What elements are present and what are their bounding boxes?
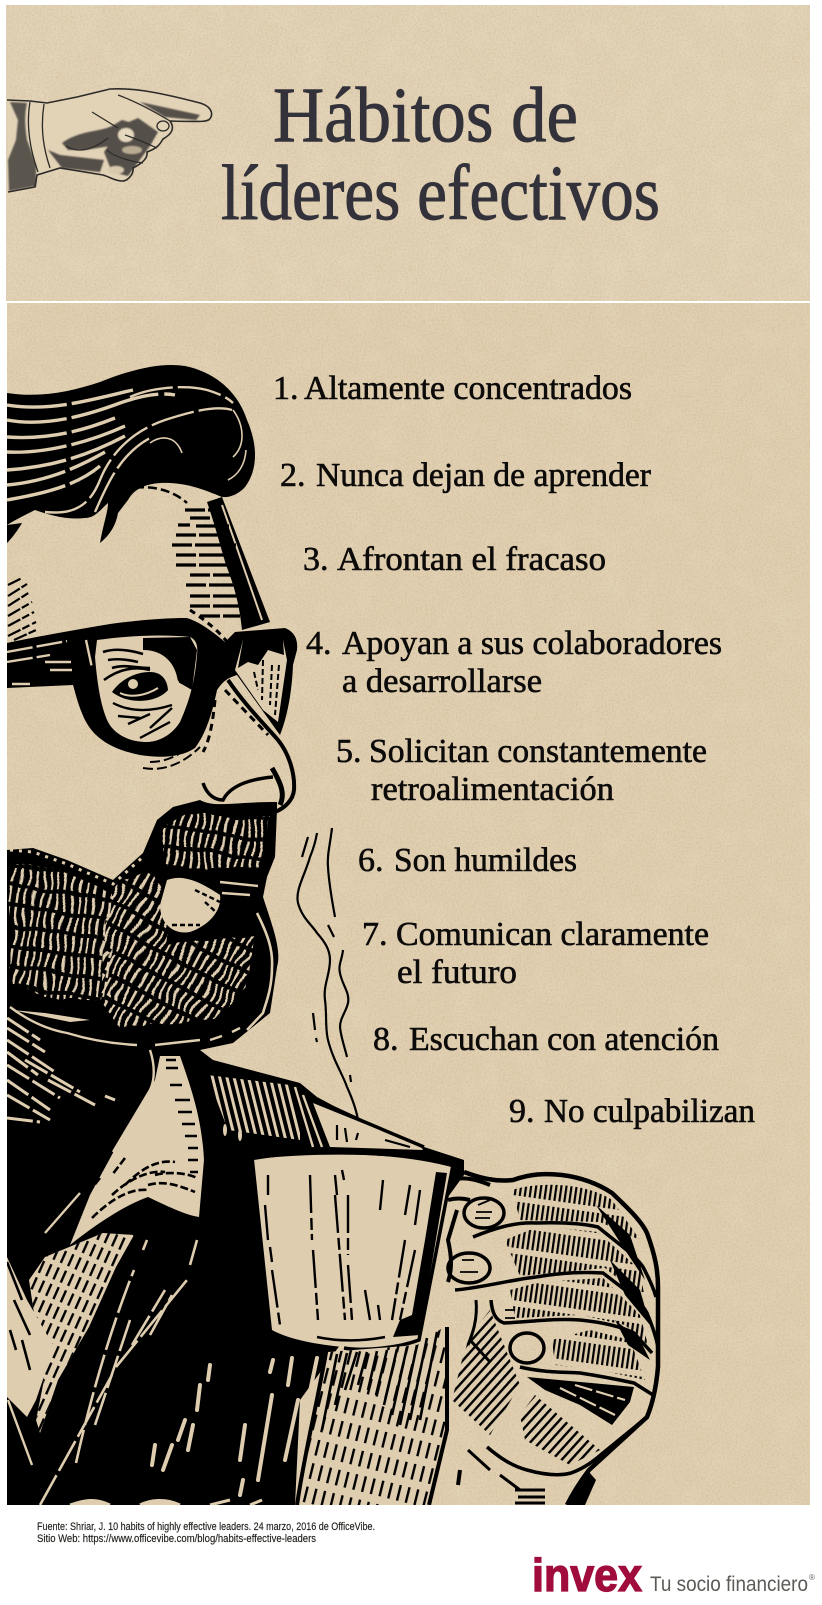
item 5	[336, 733, 707, 808]
item 8: 8.	[373, 1021, 398, 1058]
item 1: 1.	[273, 370, 298, 407]
logo: invex	[532, 1549, 815, 1601]
panel: main paper background	[7, 303, 810, 1505]
title line 2: líderes efectivos	[221, 149, 660, 236]
glasses	[7, 618, 297, 757]
item 6: Son humildes	[394, 842, 577, 879]
logo tagline: Tu socio financiero	[650, 1573, 808, 1596]
item 2: Nunca dejan de aprender	[316, 457, 652, 494]
item 7: el futuro	[397, 954, 517, 991]
item 2: 2.	[280, 457, 306, 494]
shoulder	[207, 1075, 424, 1150]
forehead shading	[172, 497, 270, 650]
item 9: No culpabilizan	[544, 1093, 755, 1130]
item 6: 6.	[358, 842, 384, 879]
shirt collar	[45, 1050, 204, 1245]
habits list	[273, 370, 755, 1130]
item 3: 3.	[303, 541, 328, 578]
item 1: Altamente concentrados	[304, 370, 632, 407]
item 4: Apoyan a sus colaboradores	[342, 625, 722, 662]
item 4: 4.	[306, 625, 332, 662]
item 5: 5.	[336, 733, 362, 770]
temple hatching	[8, 578, 36, 640]
hair	[7, 365, 255, 543]
eye	[103, 650, 179, 738]
item 3: Afrontan el fracaso	[337, 541, 606, 578]
title	[221, 71, 660, 236]
beard and jacket mass	[7, 800, 464, 1505]
illustration: bearded man with coffee	[7, 365, 658, 1505]
title line 1: Hábitos de	[273, 71, 578, 158]
beard hatching	[10, 812, 272, 1045]
item 8: Escuchan con atención	[409, 1021, 719, 1058]
item 7	[362, 916, 709, 991]
nose	[143, 680, 294, 812]
jacket lapel	[7, 1233, 317, 1505]
item 9: 9.	[509, 1093, 534, 1130]
registered mark: ®	[809, 1573, 815, 1582]
item 5: retroalimentación	[371, 771, 614, 808]
panel: title paper background	[6, 5, 810, 301]
sleeve	[295, 1325, 447, 1505]
item 4: a desarrollarse	[342, 663, 542, 700]
steam	[297, 828, 358, 1120]
source line 2: Sitio Web: https://www.officevibe.com/blog/habits-effective-leaders	[37, 1533, 316, 1545]
item 4	[306, 625, 722, 700]
source line 1: Fuente: Shriar, J. 10 habits of highly effective leaders. 24 marzo, 2016 de OfficeVibe.	[37, 1521, 375, 1533]
coffee cup	[252, 1152, 456, 1349]
logo wordmark: invex	[532, 1549, 642, 1601]
item 5: Solicitan constantemente	[369, 733, 707, 770]
source note	[37, 1521, 375, 1545]
item 7: Comunican claramente	[396, 916, 709, 953]
icon: pointing hand	[7, 89, 212, 192]
finger hatching	[452, 1185, 650, 1505]
hand holding the cup	[448, 1172, 658, 1505]
neck hatching	[7, 1018, 115, 1122]
item 7: 7.	[362, 916, 388, 953]
